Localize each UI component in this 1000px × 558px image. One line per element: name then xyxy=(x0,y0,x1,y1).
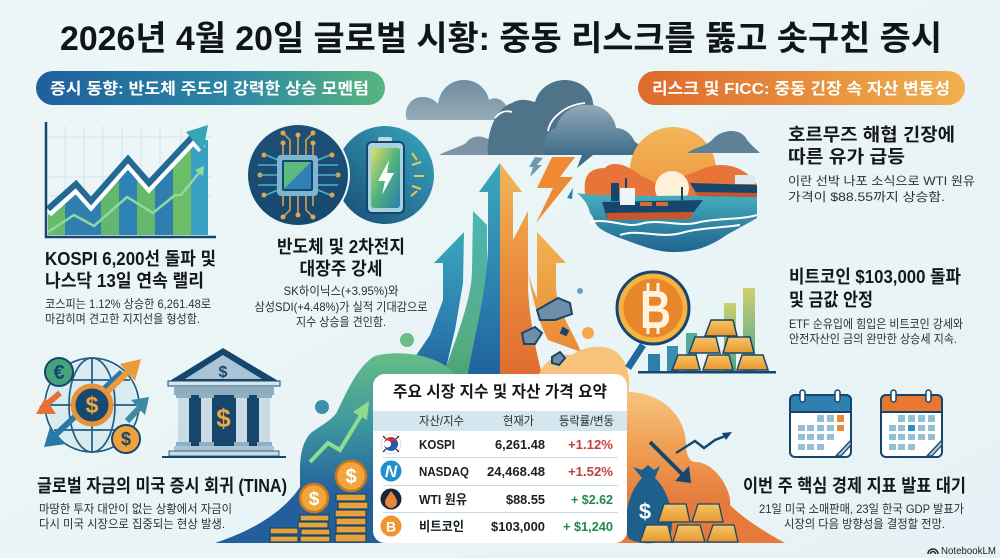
heading: bitcoin: 비트코인 $103,000 돌파 xyxy=(789,267,961,287)
icon: bank: $ xyxy=(216,403,231,433)
panel: KOSPI rally xyxy=(45,122,216,326)
illustration: bitcoin magnifier with gold bars: B xyxy=(640,280,671,340)
arrow: center blue half xyxy=(466,163,500,385)
table header row: 등락률/변동 xyxy=(559,414,614,428)
row: WTI xyxy=(380,488,613,510)
coin stacks: $ xyxy=(309,489,320,510)
table title: 주요 시장 지수 및 자산 가격 요약 xyxy=(393,383,607,401)
icon: calendar blue xyxy=(790,390,851,457)
panel: semiconductor and battery: 대장주 강세 xyxy=(300,259,382,279)
row: Bitcoin: 비트코인 xyxy=(419,519,464,534)
arrow: orange right xyxy=(528,232,581,352)
row: KOSPI xyxy=(381,434,613,454)
lightning xyxy=(529,155,593,223)
row: Bitcoin: + $1,240 xyxy=(563,519,613,534)
row: WTI: $88.55 xyxy=(506,492,545,507)
line and bar chart xyxy=(46,122,216,237)
heading: KOSPI: KOSPI 6,200선 돌파 및 xyxy=(45,249,216,269)
panel: bitcoin and gold xyxy=(617,267,963,374)
coin stacks: $ xyxy=(345,466,357,488)
illustration: tankers at sea xyxy=(577,127,760,252)
section header: risk and FICC: 리스크 및 FICC: 중동 긴장 속 자산 변동성 xyxy=(652,80,950,98)
illustration: rising arrows and hills xyxy=(215,163,785,543)
description: Hormuz: 이란 선박 나포 소식으로 WTI 원유 xyxy=(788,174,975,188)
panel: Hormuz tension: 가격이 $88.55까지 상승함. xyxy=(788,190,945,204)
row: WTI: + $2.62 xyxy=(571,492,613,507)
panel: semiconductor and battery: 지수 상승을 견인함. xyxy=(296,315,386,329)
description: semiconductor: SK하이닉스(+3.95%)와 xyxy=(284,284,398,298)
heading: Hormuz: 호르무즈 해협 긴장에 xyxy=(788,125,955,145)
hill: orange xyxy=(500,385,785,543)
row: NASDAQ: NASDAQ xyxy=(419,464,469,479)
illustration: money bag and gold: $ xyxy=(639,499,651,524)
icon: globe with currency arrows: $ xyxy=(121,429,131,449)
description: TINA: 마땅한 투자 대안이 없는 상황에서 자금이 xyxy=(39,502,232,516)
row: NASDAQ xyxy=(380,460,613,482)
panel: KOSPI rally: 나스닥 13일 연속 랠리 xyxy=(45,271,204,291)
arrow: green xyxy=(440,211,487,385)
icon: globe with currency arrows xyxy=(36,358,149,453)
illustration: storm clouds and lightning xyxy=(406,80,647,223)
table header row xyxy=(373,411,627,431)
icon: chip xyxy=(246,123,350,227)
row: Bitcoin: B xyxy=(386,518,396,534)
panel: Hormuz tension xyxy=(577,125,975,252)
section header: risk and FICC xyxy=(638,71,965,105)
table: market summary xyxy=(373,374,627,543)
panel: economic calendar xyxy=(743,390,966,531)
panel: bitcoin and gold: 및 금값 안정 xyxy=(789,290,873,310)
panel: bitcoin and gold: 안전자산인 금의 완만한 상승세 지속. xyxy=(789,332,957,346)
panel: semiconductor and battery: 삼성SDI(+4.48%)가 실적 기대감으로 xyxy=(254,300,428,314)
illustration: bitcoin magnifier with gold bars xyxy=(617,272,776,374)
row: NASDAQ: 24,468.48 xyxy=(487,464,545,479)
row: KOSPI: +1.12% xyxy=(568,437,613,452)
row: NASDAQ: N xyxy=(385,462,398,481)
row: KOSPI: KOSPI xyxy=(419,437,455,452)
row: NASDAQ: +1.52% xyxy=(568,464,613,479)
decorative dots xyxy=(315,288,594,414)
table header row: 현재가 xyxy=(503,414,534,428)
arrow: center orange half xyxy=(500,163,545,385)
table header row: 자산/지수 xyxy=(419,414,464,428)
title: 2026년 4월 20일 글로벌 시황: 중동 리스크를 뚫고 솟구친 증시 xyxy=(60,20,942,58)
icon: battery xyxy=(336,126,434,224)
watermark: NotebookLM: NotebookLM xyxy=(941,545,996,557)
row: KOSPI: 6,261.48 xyxy=(495,437,545,452)
heading: semiconductor: 반도체 및 2차전지 xyxy=(277,237,405,257)
row: Bitcoin xyxy=(380,516,613,536)
arrow: blue left xyxy=(413,232,464,385)
cloud: back xyxy=(406,80,507,120)
panel: economic calendar: 시장의 다음 방향성을 결정할 전망. xyxy=(784,517,945,531)
panel: global capital return xyxy=(36,348,287,531)
icon: globe with currency arrows: € xyxy=(53,362,65,384)
illustration: money bag and gold xyxy=(626,432,738,543)
section header: stock trends: 증시 동향: 반도체 주도의 강력한 상승 모멘텀 xyxy=(50,80,369,98)
rocks xyxy=(522,298,572,365)
cloud hill: pale orange above table xyxy=(537,347,629,395)
panel: global capital return: 다시 미국 시장으로 집중되는 현상 발생. xyxy=(39,517,225,531)
panel: Hormuz tension: 따른 유가 급등 xyxy=(788,147,905,167)
cloud: main xyxy=(439,80,647,155)
row: WTI: WTI 원유 xyxy=(419,492,467,507)
panel: semiconductor and battery xyxy=(246,123,434,329)
description: economic indicators: 21일 미국 소매판매, 23일 한국 GDP 발표가 xyxy=(759,502,964,516)
heading: TINA: 글로벌 자금의 미국 증시 회귀 (TINA) xyxy=(37,476,287,496)
row: Bitcoin: $103,000 xyxy=(491,519,545,534)
panel: KOSPI rally: 마감히며 견고한 지지선을 형성함. xyxy=(45,312,200,326)
section header: stock trends xyxy=(36,71,385,105)
description: bitcoin: ETF 순유입에 힘입은 비트코인 강세와 xyxy=(789,317,963,331)
coin stacks xyxy=(270,461,368,542)
icon: calendar orange xyxy=(881,390,942,457)
description: KOSPI: 코스피는 1.12% 상승한 6,261.48로 xyxy=(45,297,211,311)
icon: bank xyxy=(162,348,286,458)
heading: economic indicators: 이번 주 핵심 경제 지표 발표 대기 xyxy=(743,476,966,496)
icon: bank: $ xyxy=(219,364,228,381)
hill: green and blue xyxy=(215,353,458,543)
arrow: small green trend xyxy=(310,401,369,462)
icon: globe with currency arrows: $ xyxy=(86,392,99,418)
